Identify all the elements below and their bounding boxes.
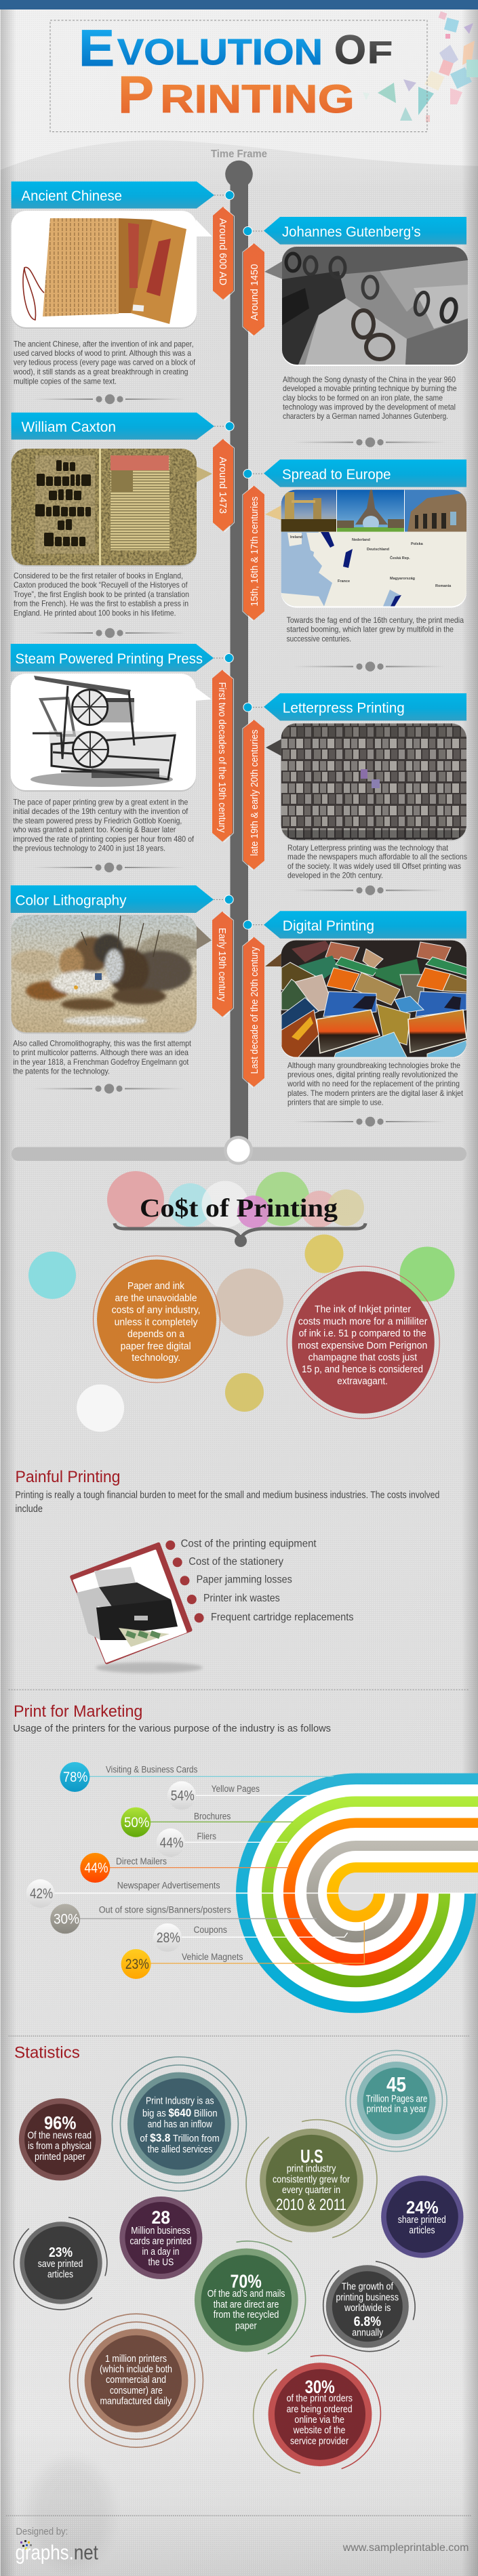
banner [264,693,466,720]
callout: inkjet ink: The ink of Inkjet printer [315,1304,411,1315]
title [50,20,427,131]
title: RINTING [160,77,355,121]
description: in the year 1818, a Frenchman Godefroy Engelmann got [13,1057,189,1067]
label: Fliers 44% [157,1828,287,1857]
timeline spine [225,161,253,1147]
label: Visiting & Business Cards 78%: Visiting & Business Cards [106,1765,198,1774]
footer credit: Designed by: [16,2526,68,2537]
photo: steam press engraving [11,674,212,792]
date tag: First two decades of the 19th century [216,682,228,833]
label: Direct Mailers 44%: Direct Mailers [116,1856,167,1866]
label: Vehicle Magnets 23% [121,1923,364,1979]
stat: 30% online orders: online via the [294,2415,344,2426]
stat: 30% online orders: of the print orders [287,2394,353,2405]
photo: metal type [264,247,468,366]
timeline node [214,191,234,199]
ring chart [54,1773,478,2013]
label: Newspaper Advertisements 42% [26,1879,220,1908]
callout: paper and ink [94,1256,220,1383]
timeline node [243,920,264,929]
banner: Steam Powered Printing Press [15,651,203,667]
description: who was granted a patent too. Koenig & Bauer later [12,825,176,834]
stat: 6.8% growth: printing business [336,2292,399,2303]
description: Although the Song dynasty of the China in the year 960 [283,375,456,384]
stat: 28 million business cards: 28 [152,2207,170,2228]
timeline node [243,469,264,478]
timeline base bar [12,1136,466,1165]
callout: inkjet ink [287,1266,439,1418]
photo: European landmarks and map: Česká Rep. [390,556,410,560]
stat: 70% [195,2241,306,2354]
label: Brochures 50%: Brochures [194,1811,231,1822]
heading: Statistics: Statistics [14,2044,80,2062]
description [12,797,195,853]
stat: 24%: 24% [406,2197,439,2217]
stat: U.S print industry: 2010 & 2011 [276,2196,346,2214]
title: E [79,20,115,77]
stat: 24%: articles [409,2226,435,2236]
description: started booming, which later grew by multifold in the [287,625,454,634]
stat: 23%: save printed [38,2259,83,2270]
heading: Painful Printing: Painful Printing [15,1468,121,1486]
stat: 6.8% growth: worldwide is [344,2303,391,2314]
banner [264,459,466,487]
photo: European landmarks and map: France [338,579,350,584]
description: Troye”, the first English book to be printed (a translation [14,590,189,599]
date tag [213,207,235,300]
title: O [334,27,366,73]
stat: 6.8% growth [323,2262,415,2352]
text: marketing intro: Usage of the printers for the various purpose of the industry is as follows [13,1723,331,1734]
stat: 28 million business cards: cards are printed [130,2236,191,2247]
graphs.net logo: graphs.net [15,2541,98,2564]
banner [11,644,214,672]
description [13,1038,192,1076]
stat: 28 million business cards: the US [148,2257,174,2268]
label: Fliers 44%: Fliers [197,1831,216,1841]
stat: 45 trillion pages: Trillion Pages are [366,2094,427,2105]
list: printing costs: Paper jamming losses [197,1574,292,1586]
label: Visiting & Business Cards 78% [60,1762,334,1792]
description: multiple copies of the same text. [14,377,117,386]
banner: Johannes Gutenberg’s [282,224,420,240]
banner: Ancient Chinese [22,188,122,204]
list: printing costs [165,1538,354,1623]
list: printing costs: Cost of the stationery [188,1556,283,1568]
footer credit [15,2526,469,2564]
timeline node [214,653,233,663]
callout: inkjet ink: costs much more for a milliliter [298,1316,427,1328]
photo: European landmarks and map: Ireland [290,535,302,539]
stat: 1 million printers: manufactured daily [100,2396,172,2407]
date tag: Early 19th century [216,928,228,1002]
panel: Spread to Europe [243,459,466,672]
banner: Letterpress Printing [283,701,405,716]
stat: U.S print industry: consistently grew for [273,2174,350,2185]
title: P [118,66,154,124]
stat: 6.8% growth: 6.8% [354,2314,381,2329]
banner: Color Lithography [15,893,127,908]
printer illustration [72,1544,203,1673]
label: Yellow Pages 54% [167,1781,309,1810]
description: printers that are simple to use. [287,1098,384,1107]
callout: inkjet ink: 15 p, and hence is considered [302,1364,423,1375]
chart labels [26,1762,364,1979]
list: printing costs: Printer ink wastes [203,1593,280,1604]
time frame label: Time Frame [211,148,267,160]
stat: $640 billion: of $3.8 Trillion from [140,2131,220,2144]
date tag: Around 1450 [249,264,260,321]
description [287,1061,464,1107]
description: to print multicolor patterns. Although there was an idea [13,1048,188,1057]
label: Coupons 28%: 28% [157,1930,180,1946]
description [283,375,457,421]
stat: 45 trillion pages [346,2050,447,2152]
description: from the French). He was the first to establish a press in [14,599,188,609]
stat: 1 million printers: commercial and [106,2375,166,2386]
photo: European landmarks and map: Nederland [352,538,370,542]
label: Yellow Pages 54%: 54% [171,1788,195,1804]
description: Caxton produced the book “Recuyell of the Historyes of [14,580,188,590]
description [287,843,467,880]
label: Out of store signs 30%: 30% [54,1911,79,1927]
stat: 23%: 23% [49,2245,73,2260]
description: the patents for the technology. [13,1066,110,1076]
label: Coupons 28% [153,1923,348,1952]
label: Vehicle Magnets 23%: 23% [125,1957,149,1972]
label: Brochures 50% [121,1807,293,1837]
label: Newspaper Advertisements 42%: 42% [30,1886,53,1902]
description: used carved blocks of wood to print. Although this was a [14,348,191,358]
stat: 1 million printers: consumer) are [110,2386,163,2396]
stat: 70%: Of the ad’s and mails [207,2289,285,2299]
stat: 1 million printers [69,2314,203,2447]
description: previous ones, digital printing really revolutionized the [287,1069,458,1079]
title: F [367,35,393,70]
description: Also called Chromolithography, this was the first attempt [13,1038,192,1048]
description [14,571,189,618]
stat: 1 million printers: 1 million printers [105,2354,167,2365]
description: developed in the 20th century. [287,870,383,880]
label: Out of store signs 30%: Out of store signs/Banners/posters [99,1904,231,1915]
date tag [212,670,233,842]
stat: 6.8% growth: The growth of [342,2281,394,2292]
date tag [243,937,264,1088]
stat: 70%: 70% [231,2270,262,2292]
timeline node [214,895,233,904]
banner: William Caxton [22,420,116,435]
photo: battle painting [10,915,212,1034]
stat: 70%: from the recycled [214,2310,279,2321]
label: Vehicle Magnets 23%: Vehicle Magnets [182,1952,243,1962]
stat: 45 trillion pages: printed in a year [366,2104,426,2114]
stat: $640 billion [112,2057,246,2191]
callout: inkjet ink: most expensive Dom Perignon [298,1340,427,1351]
stat: $640 billion: Print Industry is as [146,2095,214,2106]
stat: 96%: 96% [44,2113,76,2133]
description: developed a movable printing technique by burning the [283,384,457,393]
description: successive centuries. [287,634,351,644]
stat: 1 million printers: (which include both [100,2364,172,2375]
callout: paper and ink: depends on a [127,1328,185,1340]
stat: $640 billion: big as $640 Billion [142,2106,218,2119]
stat: 96%: Of the news read [27,2131,92,2142]
description: initial decades of the 19th century with the invention of [13,806,188,816]
photo: European landmarks and map: Deutschland [367,548,389,552]
label: Newspaper Advertisements 42%: Newspaper Advertisements [117,1880,220,1891]
banner: Spread to Europe [282,467,391,483]
timeline node [243,226,264,236]
panel: Digital Printing [243,911,468,1126]
stat: U.S print industry: print industry [287,2163,336,2174]
date tag [243,243,264,336]
date tag: Around 1473 [217,457,228,514]
list: printing costs: Cost of the printing equipment [181,1538,317,1549]
label: Direct Mailers 44% [80,1853,289,1883]
title: VOLUTION [117,32,323,73]
photo: European landmarks and map: Polska [411,542,424,546]
stat: 96% [19,2098,101,2181]
description: The pace of paper printing grew by a great extent in the [13,797,188,806]
date tag [212,912,233,1017]
description: very tedious process (every page was carved on a block of [14,358,196,367]
stat: U.S print industry: U.S [300,2146,323,2167]
list: printing costs: Frequent cartridge replacements [211,1612,354,1623]
stat: 30% online orders: are being ordered [287,2405,353,2415]
panel: Color Lithography [10,885,233,1094]
stat: 6.8% growth: annually [352,2327,384,2338]
section heading: Cost of Printing: Co$t of Printing [140,1194,338,1223]
date tag [243,486,264,621]
timeline node [214,422,234,431]
stat: $640 billion: the allied services [148,2144,212,2155]
stat: 70%: that are direct are [214,2299,279,2310]
stat: 70%: paper [235,2321,257,2331]
callout: paper and ink: paper free digital [121,1341,191,1352]
stat: 30% online orders: 30% [305,2377,335,2397]
photo: European landmarks and map: Magyarország [390,577,415,581]
label: Yellow Pages 54%: Yellow Pages [212,1784,260,1794]
callout: inkjet ink: extravagant. [337,1376,388,1387]
stat: 23% [14,2217,107,2310]
label: Direct Mailers 44%: 44% [84,1860,108,1876]
description: world with no need for the replacement of the printing [287,1079,460,1088]
decorative coloured cubes [363,12,478,122]
section heading: Cost of Printing [107,1171,365,1247]
date tag [243,720,264,870]
callout: paper and ink: Paper and ink [127,1280,184,1292]
date tag [213,439,235,532]
description: Rotary Letterpress printing was the technology that [287,843,449,853]
photo: type blocks [266,723,466,841]
panel: William Caxton [12,413,234,638]
description: improved the rate of printing copies per hour from 480 of [13,834,195,844]
callout: paper and ink: unless it completely [115,1316,198,1328]
photo: scattered prints [265,941,468,1059]
date tag: late 19th & early 20th centuries [249,729,260,856]
stat: 30% online orders [254,2355,380,2473]
stat: U.S print industry: every quarter in [282,2185,340,2196]
decorative bubbles [28,1235,454,1432]
date tag: Last decade of the 20th century [249,947,260,1074]
photo: Recuyell book [12,449,212,567]
photo: European landmarks and map [265,490,466,608]
description: clay blocks to be formed on an iron plate, the same [283,393,443,403]
callout: inkjet ink: champagne that costs just [308,1351,418,1363]
label: Coupons 28%: Coupons [194,1925,227,1935]
stat: 30% online orders: service provider [290,2436,348,2447]
description: characters by a German named Johannes Gutenberg. [283,411,448,421]
label: Visiting & Business Cards 78%: 78% [63,1770,88,1785]
stat: 96%: is from a physical [28,2141,92,2152]
photo: woodblock book [12,211,212,329]
panel: Ancient Chinese [12,182,234,404]
heading: Print for Marketing: Print for Marketing [14,1702,142,1721]
stat: 24% [381,2175,464,2258]
description [287,615,464,644]
timeline node [243,703,264,712]
panel: Steam Powered Printing Press [11,644,233,872]
banner [11,885,214,913]
callout: paper and ink: technology. [132,1352,180,1364]
banner [264,217,466,245]
callout: paper and ink: costs of any industry, [112,1304,201,1316]
description: wood), it still stands as a great breakthrough in creating [13,367,188,377]
text: painful printing intro [15,1490,439,1515]
banner [12,413,214,440]
callout: inkjet ink: of ink i.e. 51 p compared to the [299,1328,426,1339]
banner [264,911,466,939]
stat: 96%: printed paper [35,2152,85,2163]
description: the previous technology to 2400 in just 18 years. [13,843,165,853]
date tag: Around 600 AD [217,218,228,285]
label: Out of store signs 30% [50,1904,317,1934]
photo: European landmarks and map: Romania [435,584,452,588]
text: painful printing intro: include [15,1504,43,1515]
stat: 28 million business cards [119,2196,202,2279]
description: the steam powered press by Friedrich Gottlob Koenig, [13,816,182,825]
stat: U.S print industry [246,2120,377,2242]
stat: 28 million business cards: in a day in [142,2247,179,2257]
label: Brochures 50%: 50% [124,1815,149,1831]
description [13,339,196,386]
website url: www.sampleprintable.com [342,2542,469,2554]
panel: Johannes Gutenberg [243,217,468,447]
stat: $640 billion: and has an inflow [148,2119,212,2130]
stat: 28 million business cards: Million business [131,2226,191,2236]
stat: 30% online orders: website of the [293,2425,345,2436]
description: The ancient Chinese, after the invention of ink and paper, [14,339,194,348]
banner [12,182,214,209]
stat: 45 trillion pages: 45 [386,2072,406,2096]
callout: paper and ink: are the unavoidable [115,1292,197,1304]
description: technology was improved by the development of metal [283,403,456,412]
banner: Digital Printing [283,918,374,934]
stat: 24%: share printed [398,2215,446,2226]
panel: Letterpress Printing [243,693,467,895]
date tag: 15th, 16th & 17th centuries [249,497,260,607]
stat: 23%: articles [47,2269,73,2280]
label: Fliers 44%: 44% [160,1835,184,1851]
description: Considered to be the first retailer of books in England, [14,571,183,580]
description: England. He printed about 100 books in his lifetime. [14,609,176,618]
